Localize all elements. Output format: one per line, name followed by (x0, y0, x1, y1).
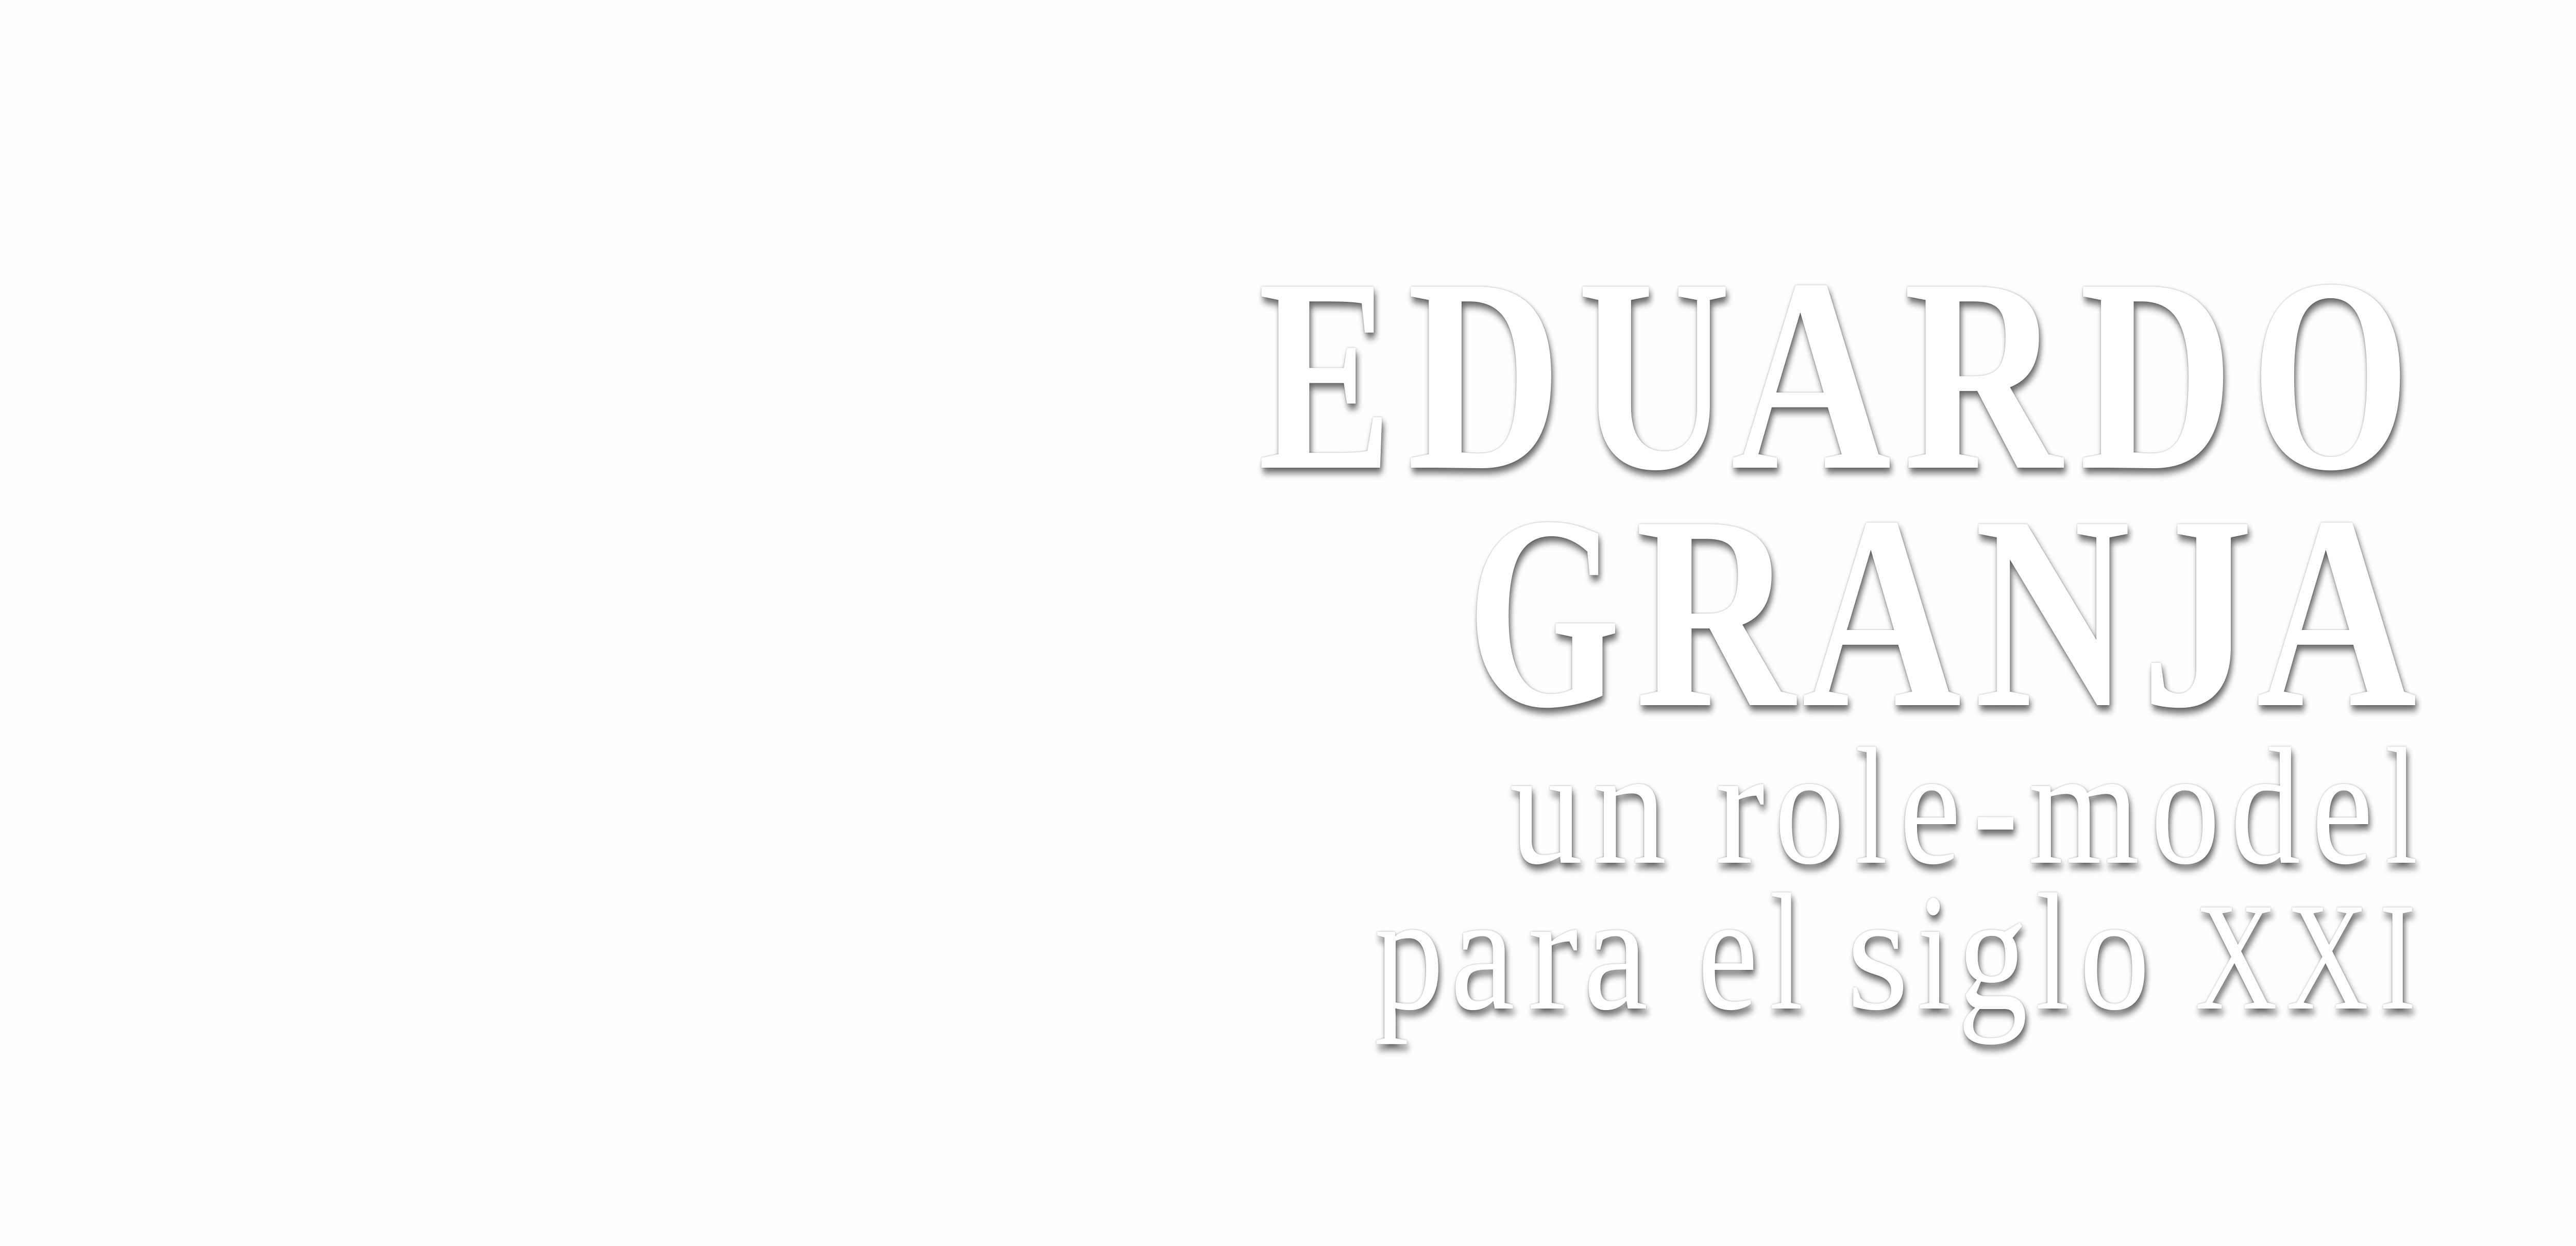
subtitle line: para el siglo XXI: l (2036, 859, 2070, 1045)
subtitle line: para el siglo XXI: g (1958, 860, 2028, 1045)
subtitle line: un role-model: u (1509, 714, 1583, 899)
subtitle line: para el siglo XXI: i (1917, 860, 1951, 1045)
heading line: EDUARDO: U (1577, 221, 1731, 528)
heading line: GRANJA: A (2256, 459, 2417, 765)
subtitle line: para el siglo XXI (1374, 859, 2416, 1045)
subtitle line: para el siglo XXI: a (1584, 860, 1648, 1045)
heading line: EDUARDO: D (2079, 221, 2233, 527)
subtitle line: para el siglo XXI: e (1698, 860, 1758, 1045)
subtitle line: para el siglo XXI: l (1769, 859, 1803, 1045)
subtitle line: un role-model: m (2028, 714, 2140, 899)
subtitle line: para el siglo XXI: a (1450, 860, 1515, 1045)
heading line: EDUARDO: E (1258, 221, 1393, 528)
subtitle line: un role-model (1509, 713, 2418, 899)
subtitle line: para el siglo XXI: X (2195, 872, 2278, 1043)
heading line: EDUARDO: D (1407, 221, 1562, 527)
subtitle line: para el siglo XXI: o (2079, 860, 2150, 1045)
heading line: GRANJA: R (1635, 459, 1798, 765)
subtitle line: para el siglo XXI: s (1846, 859, 1909, 1045)
subtitle line: un role-model: e (2312, 714, 2373, 899)
subtitle line: para el siglo XXI: X (2286, 872, 2369, 1043)
subtitle line: un role-model: r (1715, 713, 1765, 899)
subtitle line: un role-model: o (2151, 714, 2220, 899)
subtitle line: un role-model: n (1592, 714, 1667, 899)
subtitle line: un role-model: e (1900, 714, 1961, 899)
heading line: GRANJA: N (1974, 459, 2130, 765)
heading line: EDUARDO: R (1903, 221, 2065, 527)
subtitle line: un role-model: l (2385, 714, 2418, 899)
heading line: GRANJA: J (2141, 459, 2253, 765)
heading line: EDUARDO: A (1731, 222, 1891, 528)
heading line: EDUARDO: O (2251, 221, 2410, 528)
subtitle line: un role-model: l (1855, 714, 1888, 899)
heading line: GRANJA: A (1802, 459, 1961, 765)
subtitle line: un role-model: o (1774, 714, 1844, 899)
subtitle line: para el siglo XXI: r (1528, 860, 1579, 1045)
subtitle line: para el siglo XXI: p (1374, 860, 1444, 1045)
heading line: GRANJA (1467, 458, 2417, 765)
subtitle line: para el siglo XXI: I (2379, 871, 2416, 1042)
subtitle line: un role-model: d (2230, 714, 2301, 899)
heading line: GRANJA: G (1467, 458, 1621, 765)
heading line: EDUARDO (1258, 221, 2410, 528)
subtitle line: un role-model: - (1973, 714, 2019, 899)
